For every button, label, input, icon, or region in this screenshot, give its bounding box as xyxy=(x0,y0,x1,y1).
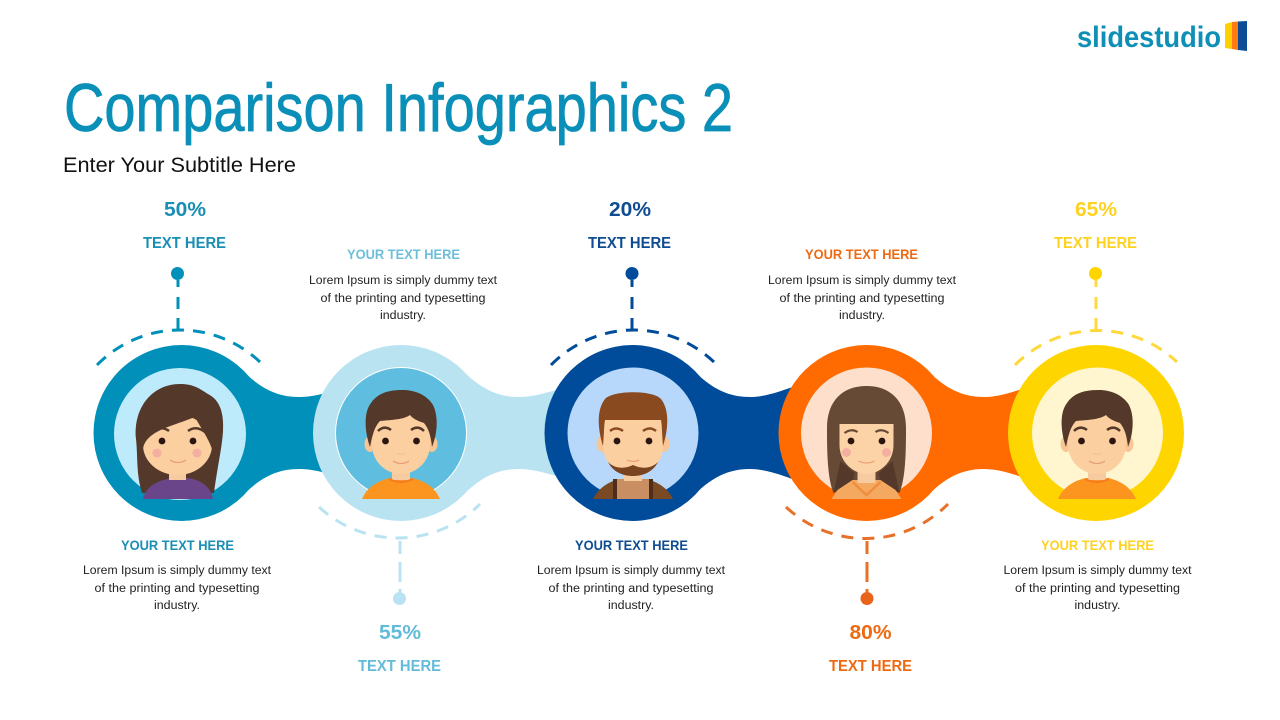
text block 1: Lorem Ipsum is simply dummy text xyxy=(83,565,272,577)
text block 3: Lorem Ipsum is simply dummy text xyxy=(537,565,726,577)
text block 1 xyxy=(83,537,272,612)
text block 1: of the printing and typesetting xyxy=(94,583,260,595)
stat 4: 80% xyxy=(829,622,912,675)
stat 2: 55%: 55% xyxy=(379,622,421,644)
text block 3: YOUR TEXT HERE xyxy=(575,537,688,553)
stat 3: 20%: 20% xyxy=(609,199,651,221)
text block 4: industry. xyxy=(839,310,885,322)
text block 2: Lorem Ipsum is simply dummy text xyxy=(309,275,498,287)
marker 5: dashed arc and pin xyxy=(1015,267,1177,365)
marker 1: dashed arc and pin xyxy=(97,267,260,365)
person 5 node: boy on yellow xyxy=(1008,345,1184,521)
marker 2: dashed arc and pin xyxy=(319,504,480,605)
text block 3: industry. xyxy=(608,600,654,612)
stat 1: 50% xyxy=(143,199,226,252)
subtitle: Enter Your Subtitle Here xyxy=(63,154,296,177)
text block 4 xyxy=(768,246,957,322)
marker 3: dashed arc and pin xyxy=(551,267,714,365)
stat 5: 65% xyxy=(1054,199,1137,252)
text block 5: industry. xyxy=(1074,600,1120,612)
stat 4: 80%: TEXT HERE xyxy=(829,658,912,675)
text block 4: YOUR TEXT HERE xyxy=(805,246,918,262)
text block 1: industry. xyxy=(154,600,200,612)
text block 4: Lorem Ipsum is simply dummy text xyxy=(768,275,957,287)
text block 2 xyxy=(309,246,498,322)
person 4 node: long-haired girl on orange xyxy=(778,345,1035,521)
stat 2: 55%: TEXT HERE xyxy=(358,658,441,675)
marker 4: dashed arc and pin xyxy=(786,504,948,605)
person 2 node: boy on light blue xyxy=(313,345,570,521)
person 3 node: bearded man on navy xyxy=(544,345,800,521)
text block 3 xyxy=(537,537,726,612)
stat 5: 65%: TEXT HERE xyxy=(1054,235,1137,252)
stat 4: 80%: 80% xyxy=(850,622,892,644)
text block 3: of the printing and typesetting xyxy=(548,583,714,595)
stat 3: 20%: TEXT HERE xyxy=(588,235,671,252)
text block 2: YOUR TEXT HERE xyxy=(347,246,460,262)
title: Comparison Infographics 2 xyxy=(64,70,733,146)
stat 1: 50%: TEXT HERE xyxy=(143,235,226,252)
stat 2: 55% xyxy=(358,622,441,675)
stat 5: 65%: 65% xyxy=(1075,199,1117,221)
text block 5: Lorem Ipsum is simply dummy text xyxy=(1004,565,1192,577)
text block 5 xyxy=(1004,537,1192,612)
text block 5: YOUR TEXT HERE xyxy=(1041,537,1154,553)
text block 4: of the printing and typesetting xyxy=(780,293,944,305)
text block 1: YOUR TEXT HERE xyxy=(121,537,234,553)
person 1 node: girl on teal xyxy=(94,345,340,521)
text block 2: industry. xyxy=(380,310,426,322)
text block 2: of the printing and typesetting xyxy=(320,293,486,305)
stat 1: 50%: 50% xyxy=(164,199,206,221)
logo: slidestudio xyxy=(1077,21,1221,54)
stat 3: 20% xyxy=(588,199,671,252)
text block 5: of the printing and typesetting xyxy=(1015,583,1180,595)
